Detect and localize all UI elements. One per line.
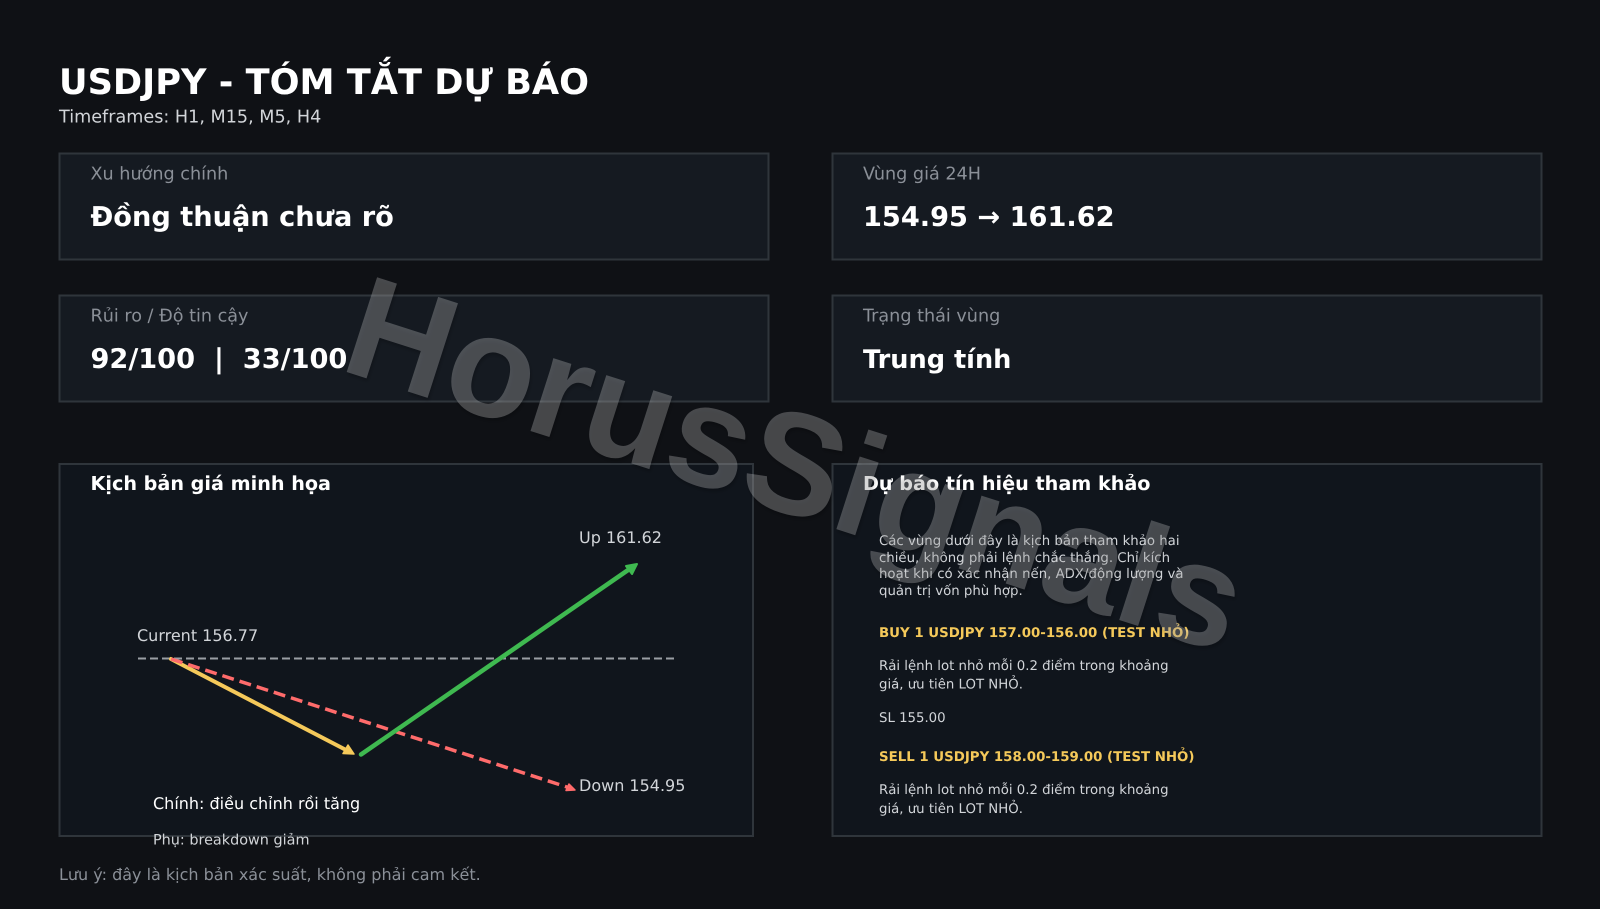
panel: main trend: Xu hướng chính xyxy=(90,164,228,184)
panel heading: signal forecast: Dự báo tín hiệu tham khảo xyxy=(863,472,1150,495)
panel: risk and confidence: Rủi ro / Độ tin cậy xyxy=(90,306,248,326)
arrow: main rise xyxy=(361,564,637,754)
legend: alternative scenario: Phụ: breakdown giảm xyxy=(153,832,309,848)
downside label: Down 154.95 xyxy=(579,776,685,795)
intro paragraph: chiều, không phải lệnh chắc thắng. Chỉ kích xyxy=(879,550,1170,566)
intro paragraph xyxy=(879,534,1184,599)
intro paragraph: hoạt khi có xác nhận nến, ADX/động lượng và xyxy=(879,566,1184,582)
subtitle: Timeframes: H1, M15, M5, H4 xyxy=(58,108,321,128)
arrow: alternative breakdown xyxy=(171,659,575,790)
upside label: Up 161.62 xyxy=(579,528,662,547)
panel: price scenario chart xyxy=(60,464,753,848)
panel: signal forecast xyxy=(832,464,1542,836)
panel: main trend xyxy=(60,154,768,260)
arrow: main correction xyxy=(171,659,354,754)
buy details: giá, ưu tiên LOT NHỎ. xyxy=(879,674,1023,692)
current price label: Current 156.77 xyxy=(137,626,258,645)
panel: zone status xyxy=(832,296,1542,402)
buy heading: BUY 1 USDJPY 157.00-156.00 (TEST NHỎ) xyxy=(879,623,1189,641)
panel: 24h price zone: 154.95 → 161.62 xyxy=(863,202,1115,233)
legend: main scenario: Chính: điều chỉnh rồi tăng xyxy=(153,794,360,813)
panel: zone status: Trạng thái vùng xyxy=(862,306,1000,326)
buy details xyxy=(879,658,1169,692)
footnote: Lưu ý: đây là kịch bản xác suất, không phải cam kết. xyxy=(59,865,481,884)
title: USDJPY - TÓM TẮT DỰ BÁO xyxy=(59,56,589,103)
stop loss: SL 155.00 xyxy=(879,711,946,726)
panel: 24h price zone xyxy=(832,154,1542,260)
panel: risk and confidence: 92/100 | 33/100 xyxy=(90,344,347,375)
sell details: giá, ưu tiên LOT NHỎ. xyxy=(879,799,1023,817)
watermark: HorusSignals xyxy=(329,247,1266,686)
watermark: HorusSignals xyxy=(328,244,1264,683)
buy details: Rải lệnh lot nhỏ mỗi 0.2 điểm trong khoảng xyxy=(879,658,1169,674)
current price line xyxy=(138,658,674,660)
sell details: Rải lệnh lot nhỏ mỗi 0.2 điểm trong khoảng xyxy=(879,782,1169,798)
panel: 24h price zone: Vùng giá 24H xyxy=(863,164,981,184)
intro paragraph: Các vùng dưới đây là kịch bản tham khảo hai xyxy=(879,534,1180,549)
sell heading: SELL 1 USDJPY 158.00-159.00 (TEST NHỎ) xyxy=(879,747,1195,765)
panel: risk and confidence xyxy=(60,296,768,402)
intro paragraph: quản trị vốn phù hợp. xyxy=(879,583,1023,599)
panel heading: price scenario: Kịch bản giá minh họa xyxy=(90,472,331,495)
panel: zone status: Trung tính xyxy=(863,345,1011,375)
panel: main trend: Đồng thuận chưa rõ xyxy=(90,202,394,233)
sell details xyxy=(879,782,1169,817)
